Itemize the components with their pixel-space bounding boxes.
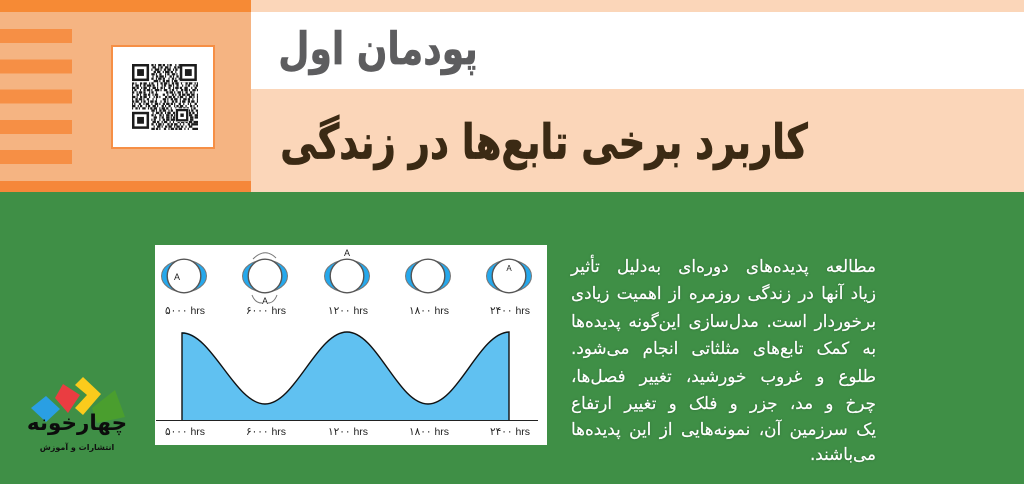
bottom hour labels: ۵۰۰۰ hrs bbox=[165, 426, 205, 438]
top hour labels: ۶۰۰۰ hrs bbox=[246, 305, 286, 317]
top hour labels: ۵۰۰۰ hrs bbox=[165, 305, 205, 317]
icon: red shape bbox=[55, 384, 80, 413]
icon: earth 1 bbox=[162, 259, 206, 293]
icon: QR code bbox=[132, 64, 198, 130]
icon: earth 2: A bbox=[262, 296, 268, 306]
bottom hour labels: ۱۲۰۰ hrs bbox=[328, 426, 368, 438]
bottom hour labels: ۲۴۰۰ hrs bbox=[490, 426, 530, 438]
panel: earth rotation and tide diagram bbox=[155, 245, 547, 445]
stripes bbox=[0, 29, 72, 164]
bottom hour labels: ۶۰۰۰ hrs bbox=[246, 426, 286, 438]
icon: earth 3: A bbox=[344, 248, 350, 258]
icon: earth 5 bbox=[486, 259, 532, 293]
text block: introduction paragraph: به کمک تابع‌های مثلثاتی انجام می‌شود. bbox=[571, 338, 876, 358]
top hour labels: ۱۲۰۰ hrs bbox=[328, 305, 368, 317]
icon: earth 5: A bbox=[506, 264, 512, 273]
top hour labels bbox=[165, 305, 530, 317]
chart: tide height curve bbox=[156, 332, 538, 420]
icon: earth 4 bbox=[406, 259, 450, 293]
bottom orange band bbox=[0, 181, 251, 192]
top hour labels: ۲۴۰۰ hrs bbox=[490, 305, 530, 317]
icon: earth 3 bbox=[324, 248, 370, 293]
top hour labels: ۱۸۰۰ hrs bbox=[409, 305, 449, 317]
bottom hour labels bbox=[165, 426, 530, 438]
text block: introduction paragraph: زیاد آنها در زندگی روزمره از اهمیت زیادی bbox=[571, 283, 876, 303]
icon: blue diamond bbox=[31, 396, 60, 422]
panel: left orange block bbox=[0, 12, 251, 181]
logo tagline: انتشارات و آموزش bbox=[40, 443, 114, 452]
icon: yellow chevron bbox=[75, 377, 101, 415]
text block: introduction paragraph: طلوع و غروب خورشید، تغییر فصل‌ها، bbox=[571, 366, 876, 386]
top orange band bbox=[0, 0, 251, 12]
panel: chapter label strip bbox=[251, 12, 1024, 89]
heading: chapter label: پودمان اول bbox=[278, 24, 478, 75]
text block: introduction paragraph: می‌باشند. bbox=[810, 444, 876, 464]
text block: introduction paragraph bbox=[570, 254, 876, 464]
text block: introduction paragraph: چرخ و مد، جزر و فلک و تغییر ارتفاع bbox=[571, 392, 876, 412]
icon: earth 1: A bbox=[174, 272, 180, 282]
logo: Chaharkhooneh publishing bbox=[27, 377, 127, 452]
text block: introduction paragraph: یک سرزمین آن، نمونه‌هایی از این پدیده‌ها bbox=[571, 419, 876, 439]
text block: introduction paragraph: مطالعه پدیده‌های دوره‌ای به‌دلیل تأثیر bbox=[571, 256, 876, 276]
icon: green square bbox=[92, 390, 125, 423]
bottom hour labels: ۱۸۰۰ hrs bbox=[409, 426, 449, 438]
icon: earth 2 bbox=[242, 253, 288, 306]
heading: chapter title: کاربرد برخی تابع‌ها در زندگی bbox=[280, 114, 808, 170]
panel: header background bbox=[0, 0, 1024, 192]
text block: introduction paragraph: برخوردار است. مدل‌سازی این‌گونه پدیده‌ها bbox=[571, 310, 876, 330]
QR code box bbox=[111, 45, 215, 149]
logo wordmark: چهارخونه bbox=[27, 411, 127, 436]
